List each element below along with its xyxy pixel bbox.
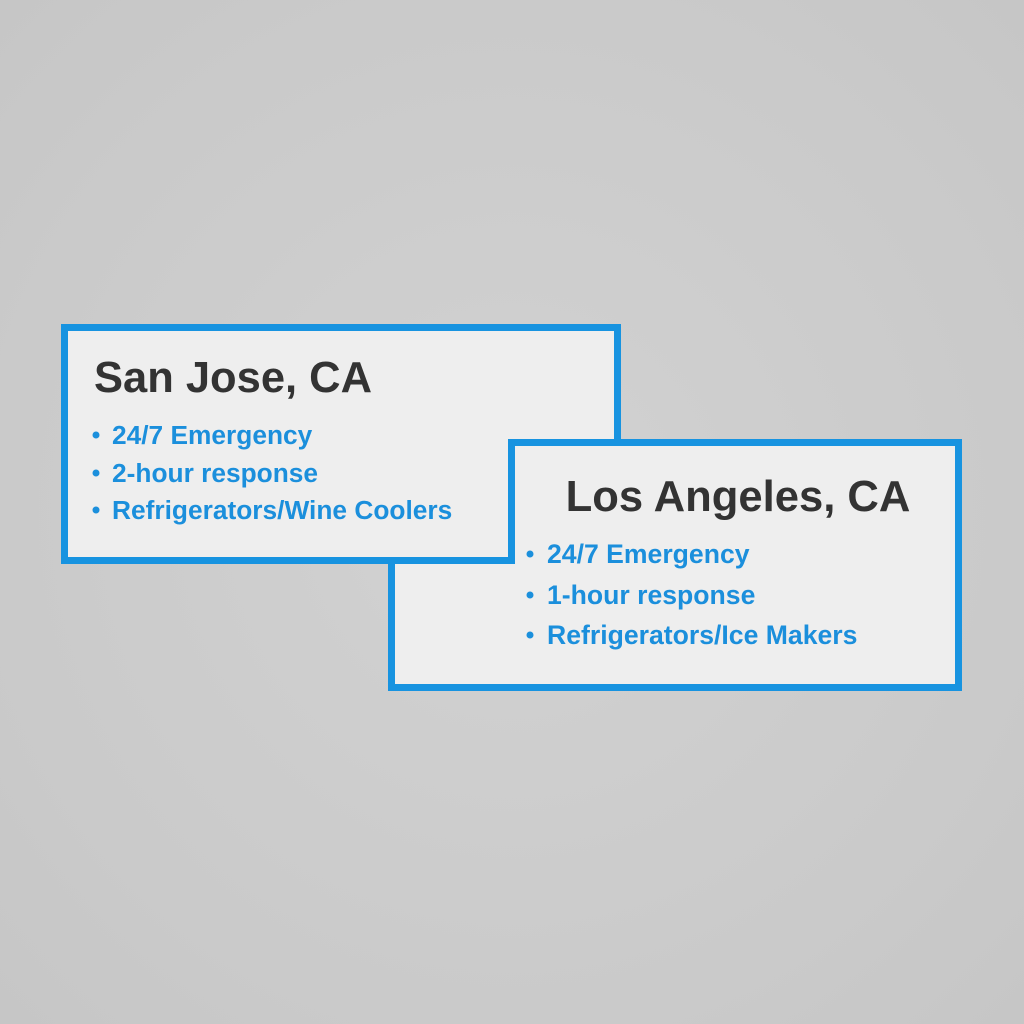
title: Los Angeles: Los Angeles, CA bbox=[566, 473, 910, 521]
card: San Jose bbox=[64, 327, 621, 564]
card: Los Angeles text bbox=[526, 473, 910, 650]
bullet list: Los Angeles: 1-hour response bbox=[547, 580, 755, 610]
bullet list: Los Angeles: 24/7 Emergency bbox=[547, 539, 750, 569]
bullet list: San Jose: 24/7 Emergency bbox=[112, 420, 313, 450]
title: San Jose: San Jose, CA bbox=[94, 354, 372, 402]
card: Los Angeles background bbox=[391, 442, 959, 688]
bullet list: San Jose bbox=[92, 420, 452, 525]
bullet list: Los Angeles: Refrigerators/Ice Makers bbox=[547, 620, 857, 650]
bullet list: Los Angeles bbox=[526, 539, 857, 650]
bullet list: San Jose: 2-hour response bbox=[112, 458, 318, 488]
bullet list: San Jose: Refrigerators/Wine Coolers bbox=[112, 495, 452, 525]
